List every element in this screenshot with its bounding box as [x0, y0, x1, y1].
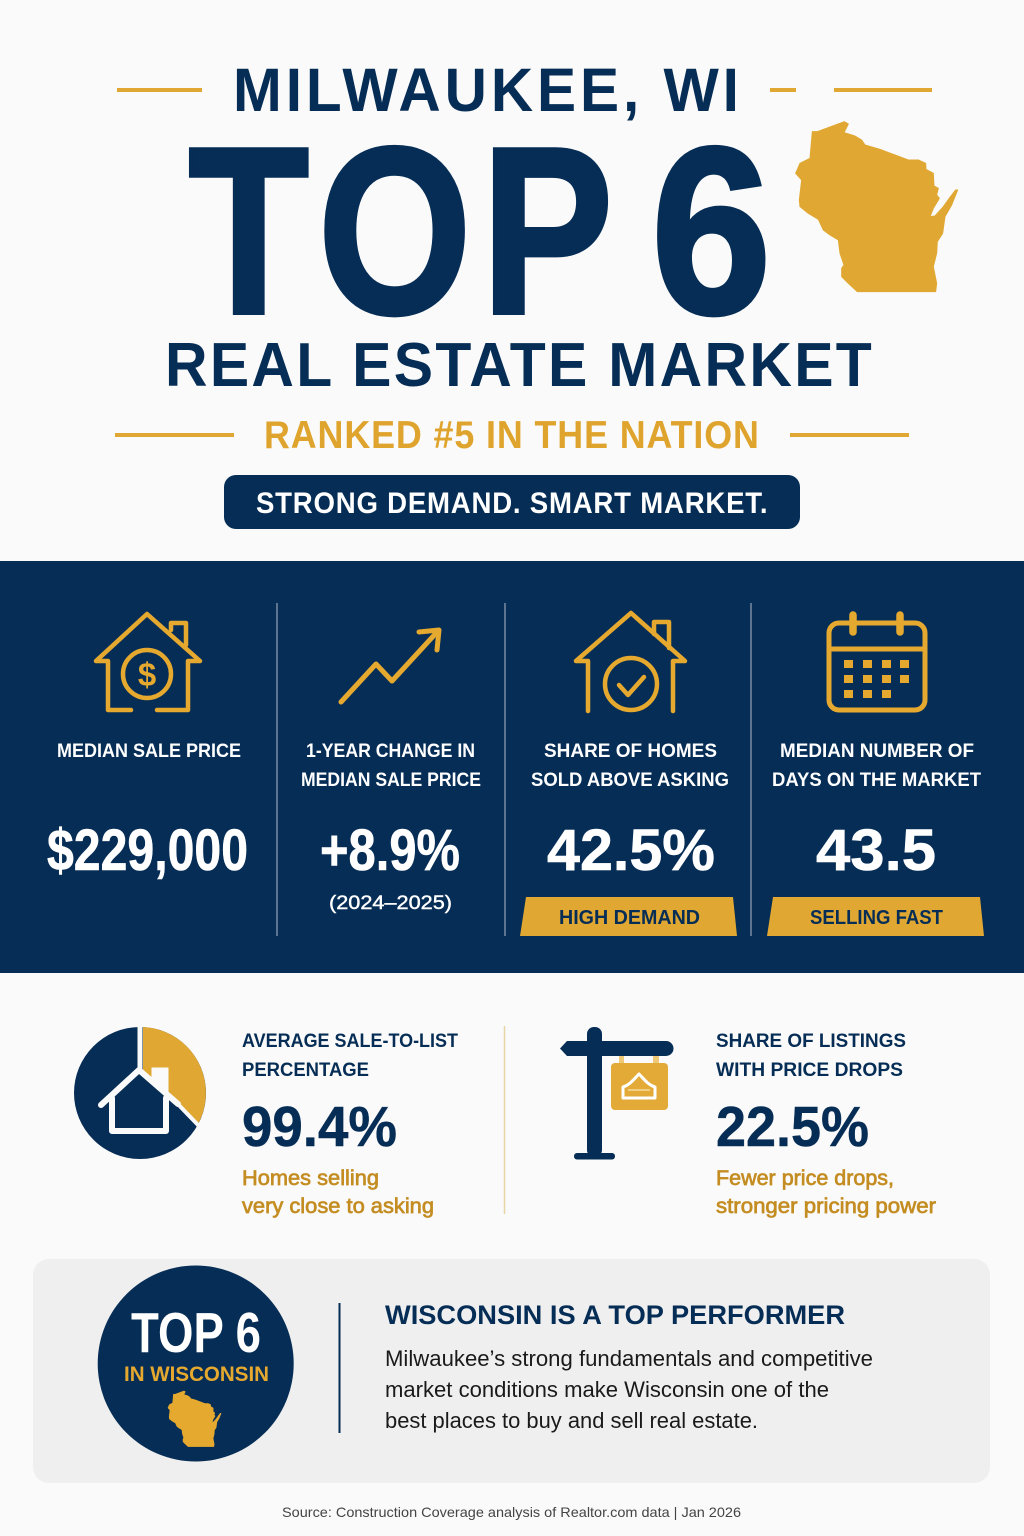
- metric: 1-year change: MEDIAN SALE PRICE: [301, 770, 481, 791]
- tagline pill: STRONG DEMAND. SMART MARKET.: [256, 487, 768, 520]
- source note: Source: Construction Coverage analysis of Realtor.com data | Jan 2026: [282, 1504, 741, 1520]
- body text: [385, 1346, 873, 1433]
- metric: sold above asking: [520, 613, 737, 936]
- label: MEDIAN NUMBER OF: [780, 741, 974, 762]
- icon: house with dollar: $: [138, 656, 156, 693]
- value: 22.5%: [716, 1095, 869, 1159]
- panel: sale-to-list percentage: [74, 1024, 458, 1218]
- metric: 1-year change: [301, 630, 481, 914]
- metric: median sale price: [47, 614, 248, 883]
- panel: key metrics band: [0, 561, 1024, 973]
- metric: days on market: DAYS ON THE MARKET: [772, 770, 981, 791]
- icon: pie chart with house: [74, 1024, 206, 1159]
- icon: real estate sign: [560, 1027, 674, 1160]
- body text: market conditions make Wisconsin one of the: [385, 1377, 829, 1402]
- panel: Wisconsin top performer: [33, 1259, 990, 1483]
- panel: sale-to-list percentage: PERCENTAGE: [242, 1059, 369, 1081]
- panel: listings with price drops: WITH PRICE DROPS: [716, 1059, 903, 1081]
- badge: high demand: HIGH DEMAND: [559, 907, 700, 929]
- label: 1-YEAR CHANGE IN: [306, 741, 475, 762]
- badge: Top 6 in Wisconsin: [98, 1266, 294, 1462]
- icon: house with dollar: [96, 614, 200, 710]
- ranking lines: [115, 433, 909, 437]
- panel: listings with price drops: [560, 1027, 936, 1218]
- panel: sale-to-list percentage: very close to asking: [242, 1195, 434, 1218]
- label: SHARE OF LISTINGS: [716, 1030, 906, 1052]
- note: Fewer price drops,: [716, 1167, 894, 1190]
- main title: Top 6: 6: [651, 99, 771, 364]
- header: [115, 56, 958, 529]
- header accent lines: [117, 88, 932, 92]
- city title: MILWAUKEE, WI: [233, 56, 739, 124]
- metric: days on market: [767, 615, 984, 936]
- subtitle: REAL ESTATE MARKET: [165, 330, 872, 399]
- icon: Wisconsin map: [796, 122, 958, 292]
- badge: high demand: [520, 897, 737, 936]
- label: SHARE OF HOMES: [544, 741, 717, 762]
- period note: (2024–2025): [329, 893, 452, 914]
- value: +8.9%: [320, 818, 460, 883]
- value: 42.5%: [547, 818, 715, 883]
- value: 43.5: [816, 818, 936, 883]
- label: AVERAGE SALE-TO-LIST: [242, 1030, 458, 1052]
- ranking text: RANKED #5 IN THE NATION: [264, 413, 759, 456]
- tagline pill: [224, 475, 800, 529]
- value: $229,000: [47, 818, 248, 883]
- body text: best places to buy and sell real estate.: [385, 1408, 758, 1433]
- badge: Top 6 in Wisconsin: IN WISCONSIN: [124, 1363, 269, 1386]
- icon: house with check: [576, 613, 685, 711]
- note: Homes selling: [242, 1167, 379, 1190]
- metric: sold above asking: SOLD ABOVE ASKING: [531, 770, 729, 791]
- label: MEDIAN SALE PRICE: [57, 741, 241, 762]
- badge: selling fast: [767, 897, 984, 936]
- value: 99.4%: [242, 1095, 397, 1159]
- heading: WISCONSIN IS A TOP PERFORMER: [385, 1300, 845, 1330]
- badge: Top 6 in Wisconsin: TOP 6: [131, 1301, 261, 1365]
- panel: listings with price drops: stronger pricing power: [716, 1195, 936, 1218]
- body text: Milwaukee’s strong fundamentals and competitive: [385, 1346, 873, 1371]
- main title: Top 6: TOP: [188, 99, 613, 364]
- badge: selling fast: SELLING FAST: [810, 907, 943, 929]
- icon: rising arrow: [341, 630, 439, 702]
- icon: calendar: [829, 615, 925, 710]
